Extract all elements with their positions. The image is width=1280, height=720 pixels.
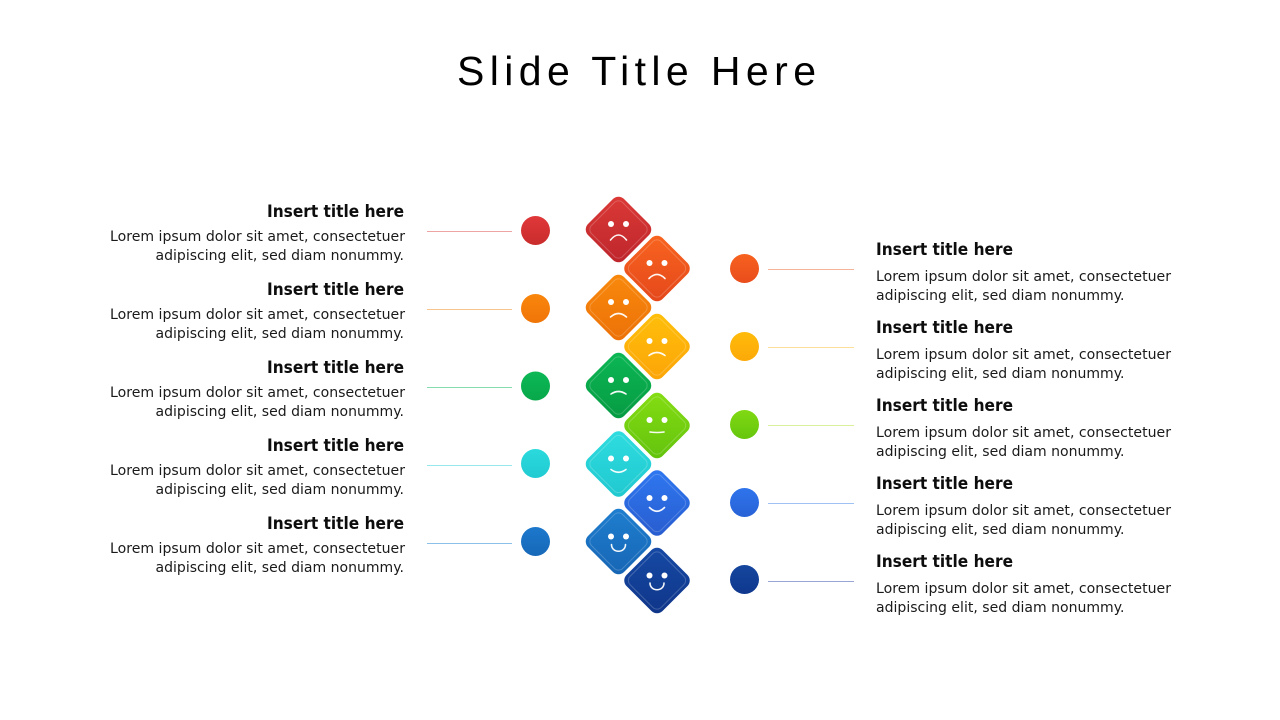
text block: right 1 — [876, 240, 1171, 304]
marker dot: amber — [730, 332, 759, 361]
text block: right 3: adipiscing elit, sed diam nonummy. — [876, 443, 1124, 460]
left item 5: blue — [110, 514, 550, 576]
text block: left 2: adipiscing elit, sed diam nonummy. — [156, 325, 404, 342]
marker dot: deep orange — [730, 254, 759, 283]
right item 5: navy — [730, 552, 1171, 616]
connector line: right 2 — [768, 346, 854, 348]
text block: right 4: Lorem ipsum dolor sit amet, consectetuer — [876, 502, 1171, 519]
text block: left 1: adipiscing elit, sed diam nonummy. — [156, 247, 404, 264]
connector line: right 1 — [768, 268, 854, 270]
text block: left 1: Insert title here — [267, 202, 404, 221]
text block: left 2: Insert title here — [267, 280, 404, 299]
text block: left 2 — [110, 280, 405, 342]
text block: left 2: Lorem ipsum dolor sit amet, consectetuer — [110, 306, 405, 323]
icon: red very sad face — [582, 193, 655, 266]
diamond column — [582, 193, 693, 617]
right item 4: bright blue — [730, 474, 1171, 538]
icon: amber sad face — [621, 310, 693, 383]
text block: right 3: Insert title here — [876, 396, 1013, 415]
text block: right 3: Lorem ipsum dolor sit amet, consectetuer — [876, 424, 1171, 441]
text block: left 3: adipiscing elit, sed diam nonummy. — [156, 403, 404, 420]
text block: left 3: Insert title here — [267, 358, 404, 377]
text block: left 4: Insert title here — [267, 436, 404, 455]
text block: right 5 — [876, 552, 1171, 616]
connector line: right 4 — [768, 502, 854, 504]
text block: right 5: adipiscing elit, sed diam nonummy. — [876, 599, 1124, 616]
connector line: right 5 — [768, 580, 854, 582]
text block: left 1: Lorem ipsum dolor sit amet, consectetuer — [110, 228, 405, 245]
text block: left 5: adipiscing elit, sed diam nonummy. — [156, 559, 404, 576]
text block: right 2: adipiscing elit, sed diam nonummy. — [876, 365, 1124, 382]
icon: bright blue smile — [621, 467, 693, 539]
text block: left 4 — [110, 436, 405, 498]
connector line: left 1 — [427, 230, 512, 232]
connector line: left 3 — [427, 386, 512, 388]
text block: right 5: Lorem ipsum dolor sit amet, consectetuer — [876, 580, 1171, 597]
icon: lime neutral face — [621, 389, 693, 462]
text block: right 1: adipiscing elit, sed diam nonummy. — [876, 287, 1124, 304]
right item 2: amber — [730, 318, 1171, 382]
marker dot: orange — [521, 294, 550, 323]
text block: left 5 — [110, 514, 405, 576]
marker dot: cyan — [521, 449, 550, 478]
text block: right 1: Lorem ipsum dolor sit amet, consectetuer — [876, 268, 1171, 285]
connector line: left 4 — [427, 464, 512, 466]
marker dot: lime — [730, 410, 759, 439]
connector line: right 3 — [768, 424, 854, 426]
text block: left 4: adipiscing elit, sed diam nonummy. — [156, 481, 404, 498]
text block: right 3 — [876, 396, 1171, 460]
marker dot: red — [521, 216, 550, 245]
connector line: left 5 — [427, 542, 512, 544]
text block: left 4: Lorem ipsum dolor sit amet, consectetuer — [110, 462, 405, 479]
text block: right 4: Insert title here — [876, 474, 1013, 493]
marker dot: green — [521, 372, 550, 400]
connector line: left 2 — [427, 308, 512, 310]
text block: left 3 — [110, 358, 405, 420]
text block: right 4 — [876, 474, 1171, 538]
left item 2: orange — [110, 280, 550, 342]
text block: left 5: Insert title here — [267, 514, 404, 533]
text block: right 5: Insert title here — [876, 552, 1013, 571]
marker dot: blue — [521, 527, 550, 556]
icon: orange sad face — [582, 271, 655, 344]
left item 1: red — [110, 202, 550, 264]
title: Slide Title Here — [457, 48, 816, 94]
text block: right 2: Insert title here — [876, 318, 1013, 337]
icon: blue big smile — [582, 505, 655, 578]
icon: green slightly sad face — [582, 349, 655, 422]
text block: left 5: Lorem ipsum dolor sit amet, consectetuer — [110, 540, 405, 557]
icon: deep orange sad face — [621, 232, 693, 305]
text block: right 1: Insert title here — [876, 240, 1013, 259]
text block: right 4: adipiscing elit, sed diam nonummy. — [876, 521, 1124, 538]
marker dot: navy — [730, 565, 759, 594]
right item 1: deep orange — [730, 240, 1171, 304]
text block: right 2 — [876, 318, 1171, 382]
left item 4: cyan — [110, 436, 550, 498]
right item 3: lime — [730, 396, 1171, 460]
text block: left 3: Lorem ipsum dolor sit amet, consectetuer — [110, 384, 405, 401]
icon: cyan slight smile — [582, 428, 655, 500]
left item 3: green — [110, 358, 550, 420]
text block: left 1 — [110, 202, 405, 264]
text block: right 2: Lorem ipsum dolor sit amet, consectetuer — [876, 346, 1171, 363]
icon: navy big smile — [621, 544, 693, 617]
marker dot: bright blue — [730, 488, 759, 517]
